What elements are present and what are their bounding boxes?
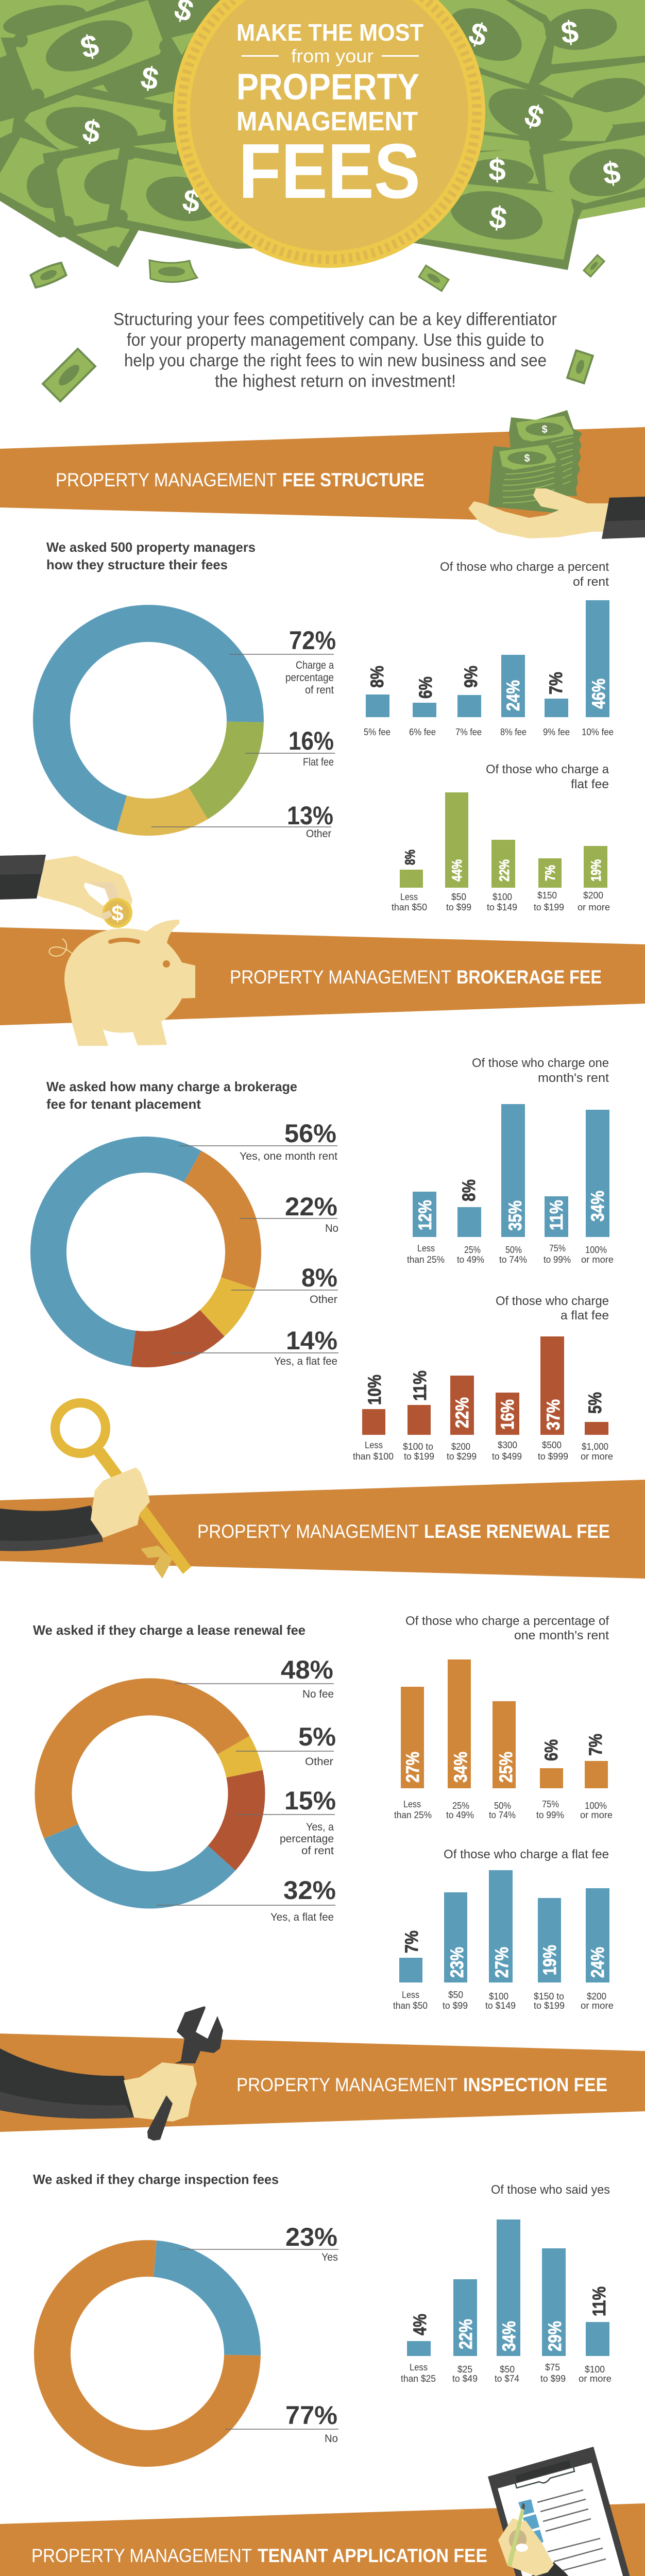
bar chart: percent of rent: of rent [573, 575, 609, 589]
heading [46, 1079, 297, 1112]
bar chart: flat fee: $200 [451, 1442, 470, 1452]
banner heading: PROPERTY MANAGEMENT [197, 1521, 419, 1542]
bar chart: percentage of rent: to 74% [489, 1810, 516, 1820]
bar chart: inspection amount: to $99 [540, 2374, 566, 2384]
coin [173, 0, 485, 268]
bar chart: percentage of rent: 100% [585, 1801, 607, 1811]
bar chart: flat fee: 19% [540, 1945, 560, 1975]
bar chart: percent of rent: 8% fee [500, 727, 527, 737]
bar chart: percentage of rent: 75% [542, 1799, 559, 1809]
legend: 32% [157, 1876, 336, 1923]
heading: We asked if they charge a lease renewal fee [33, 1622, 305, 1638]
bar chart: percent of rent: 46% [589, 679, 609, 709]
bar chart: one month's rent: 100% [585, 1245, 607, 1255]
panel: inspection survey [33, 2172, 612, 2456]
legend: 72%: percentage [285, 672, 334, 684]
banner: inspection fee [0, 2006, 645, 2141]
legend: 15% [236, 1786, 336, 1857]
panel: brokerage fee survey [8, 1056, 614, 1462]
bar chart: inspection amount: Less [410, 2362, 428, 2372]
legend: 14%: Yes, a flat fee [274, 1355, 337, 1367]
bar chart: one month's rent: 35% [505, 1200, 525, 1231]
legend: 8%: 8% [301, 1263, 337, 1292]
bar chart: one month's rent: than 25% [407, 1255, 445, 1265]
bar chart: flat fee: 7% [402, 1930, 422, 1953]
bar chart: flat fee: 23% [447, 1947, 467, 1978]
bar chart: flat fee: $1,000 [582, 1442, 608, 1452]
bar chart: flat fee: 22% [452, 1397, 472, 1428]
money background: $ [80, 113, 103, 150]
bar chart: one month's rent: Less [417, 1243, 435, 1253]
bar chart: flat fee: 22% [497, 859, 512, 882]
legend: 16% [245, 726, 335, 768]
bar chart: flat fee: to $199 [534, 2001, 565, 2011]
legend: 13% [151, 801, 333, 840]
heading: fee for tenant placement [46, 1096, 201, 1112]
bar chart: one month's rent: to 74% [499, 1255, 527, 1265]
bar chart: percentage of rent: 25% [452, 1801, 469, 1811]
bar chart: one month's rent: or more [581, 1255, 614, 1265]
legend: 32%: Yes, a flat fee [270, 1911, 334, 1923]
bar chart: flat fee: to $199 [534, 902, 564, 912]
bar chart: flat fee: to $299 [447, 1451, 477, 1462]
bar chart: percent of rent: 5% fee [364, 727, 391, 737]
money background: $ [138, 60, 161, 97]
bar chart: flat fee [353, 1294, 613, 1462]
heading [46, 539, 256, 572]
legend: 72%: 72% [289, 626, 336, 655]
bar chart: flat fee: $300 [498, 1440, 517, 1450]
icon: hand holding money stacks: $ [541, 424, 548, 435]
bar chart: flat fee: 5% [585, 1392, 605, 1414]
legend: 23% [179, 2223, 338, 2263]
legend: 14% [171, 1326, 338, 1367]
money background [0, 0, 645, 273]
bar chart: percentage of rent: than 25% [394, 1810, 432, 1820]
bar chart: inspection amount: $75 [545, 2362, 560, 2372]
bar chart: flat fee: to $149 [485, 2001, 516, 2011]
bar chart: inspection amount: Of those who said yes [491, 2183, 610, 2197]
donut chart [45, 2251, 250, 2456]
legend: 8%: Other [310, 1294, 337, 1306]
bar chart: percentage of rent: 7% [586, 1734, 606, 1756]
bar chart: inspection amount: 29% [545, 2321, 565, 2351]
bar chart: percent of rent: 10% fee [582, 727, 614, 737]
bar chart: flat fee: to $149 [487, 902, 517, 912]
title: MANAGEMENT [236, 107, 418, 137]
legend: 14%: 14% [286, 1326, 337, 1355]
bar chart: percent of rent: 9% [461, 666, 481, 688]
legend: 5%: Other [305, 1756, 333, 1768]
bar chart: flat fee: flat fee [571, 777, 609, 791]
bar chart: one month's rent: month's rent [538, 1071, 609, 1085]
banner heading: PROPERTY MANAGEMENT [56, 469, 277, 490]
legend: 48%: No fee [302, 1688, 334, 1700]
legend: 72%: Charge a [296, 659, 334, 671]
banner heading: LEASE RENEWAL FEE [424, 1521, 610, 1542]
bar chart: percentage of rent: to 49% [446, 1810, 474, 1820]
bar chart: flat fee: 19% [588, 859, 604, 882]
icon: clipboard with hand and pencil [488, 2447, 645, 2576]
bar chart: flat fee: to $199 [404, 1451, 434, 1462]
bar chart: one month's rent: 75% [549, 1243, 566, 1253]
bar chart: percent of rent: Of those who charge a percent [440, 560, 609, 574]
bar chart: one month's rent: 25% [464, 1245, 481, 1255]
bar chart: percent of rent [364, 560, 614, 737]
bar chart: flat fee: $150 to [534, 1991, 564, 2002]
bar chart: flat fee: 8% [402, 850, 418, 865]
bar chart: flat fee: to $99 [446, 902, 471, 912]
bar chart: one month's rent: 11% [547, 1200, 567, 1230]
legend: 16%: Flat fee [303, 756, 334, 768]
donut chart [15, 587, 281, 853]
legend: 77%: 77% [285, 2401, 337, 2430]
bar chart: flat fee: or more [581, 2001, 614, 2011]
bar chart: inspection amount: 22% [456, 2319, 476, 2349]
bar chart: percent of rent: 9% fee [543, 727, 570, 737]
bar chart: one month's rent: to 49% [457, 1255, 484, 1265]
bar chart: flat fee: 11% [410, 1370, 430, 1401]
bar chart: flat fee: Of those who charge [496, 1294, 609, 1308]
bar chart: flat fee: 24% [588, 1947, 608, 1978]
panel: fee structure survey [15, 539, 614, 912]
legend: 22% [240, 1192, 338, 1234]
bar chart: flat fee: than $50 [393, 2001, 428, 2011]
money background: $ [487, 199, 509, 236]
bar chart: flat fee: $50 [448, 1990, 463, 2000]
banner heading: INSPECTION FEE [463, 2074, 607, 2095]
bar chart: flat fee: $200 [583, 890, 603, 901]
bar chart: one month's rent: Of those who charge one [472, 1056, 609, 1070]
bar chart: flat fee: to $499 [492, 1451, 522, 1462]
legend: 56%: Yes, one month rent [240, 1150, 337, 1162]
title: MAKE THE MOST [236, 19, 423, 46]
title: FEES [239, 127, 420, 214]
donut chart [8, 1114, 283, 1389]
bar chart: flat fee: 37% [544, 1399, 564, 1430]
icon: hand holding key [0, 1403, 191, 1579]
bar chart: flat fee: to $99 [443, 2001, 468, 2011]
legend: 32%: 32% [283, 1876, 336, 1905]
legend: 15%: percentage [280, 1833, 334, 1845]
bar chart: flat fee: or more [578, 902, 610, 912]
banner: tenant application fee [0, 2447, 645, 2576]
bar chart: flat fee: Less [400, 892, 418, 902]
legend: 22%: No [325, 1223, 338, 1234]
bar chart: flat fee: than $50 [392, 902, 427, 912]
legend: 8% [231, 1263, 338, 1306]
bar chart: inspection amount: 4% [410, 2314, 430, 2335]
title [236, 19, 423, 214]
bar chart: percentage of rent: or more [580, 1810, 613, 1820]
legend: 16%: 16% [288, 726, 334, 755]
legend: 13%: Other [306, 828, 331, 840]
bar chart: flat fee: 10% [365, 1375, 385, 1405]
bar chart: percentage of rent: 6% [541, 1739, 562, 1761]
donut chart [13, 1657, 286, 1930]
intro text: for your property management company. Use this guide to [127, 330, 544, 350]
bar chart: inspection amount: 11% [589, 2286, 609, 2316]
legend: 72%: of rent [305, 684, 334, 696]
heading: We asked if they charge inspection fees [33, 2172, 279, 2187]
legend: 77%: No [325, 2433, 338, 2445]
banner: brokerage fee [0, 920, 645, 1046]
bar chart: flat fee: Less [365, 1440, 383, 1450]
legend: 23%: 23% [285, 2223, 337, 2251]
intro text: help you charge the right fees to win new business and see [124, 351, 547, 370]
title: from your [291, 45, 374, 66]
legend: 13%: 13% [287, 801, 333, 830]
icon: piggy bank [49, 920, 195, 1046]
money background: $ [488, 152, 506, 187]
banner heading: PROPERTY MANAGEMENT [236, 2074, 457, 2095]
banner heading: FEE STRUCTURE [282, 469, 425, 490]
bar chart: percent of rent: 7% fee [455, 727, 482, 737]
bar chart: percentage of rent: 50% [494, 1801, 511, 1811]
heading: how they structure their fees [46, 557, 228, 572]
bar chart: percent of rent: 24% [503, 680, 523, 711]
icon: hand dropping coin: $ [111, 901, 124, 925]
bar chart: flat fee: 44% [449, 859, 465, 882]
bar chart: flat fee: or more [581, 1451, 613, 1462]
legend: 56% [179, 1119, 337, 1162]
bar chart: flat fee: $500 [542, 1440, 562, 1450]
bar chart: percent of rent: 6% fee [409, 727, 436, 737]
legend: 48% [175, 1655, 334, 1700]
bar chart: inspection amount: $100 [585, 2364, 605, 2375]
money background: $ [465, 15, 492, 54]
bar chart: inspection amount [401, 2183, 612, 2384]
bar chart: percent of rent: 8% [367, 666, 387, 688]
legend: 22%: 22% [285, 1192, 337, 1221]
bar chart: inspection amount: to $74 [495, 2374, 519, 2384]
money background: $ [77, 28, 102, 65]
bar chart: flat fee: Of those who charge a [486, 762, 609, 776]
bar chart: percentage of rent: 27% [403, 1752, 423, 1783]
legend: 56%: 56% [284, 1119, 336, 1148]
intro text [113, 310, 557, 391]
icon: hand holding money stacks [468, 410, 645, 539]
bar chart: one month's rent: 12% [415, 1200, 435, 1230]
legend: 15%: Yes, a [306, 1821, 334, 1833]
intro text: Structuring your fees competitively can be a key differentiator [113, 310, 557, 329]
intro text: the highest return on investment! [215, 371, 456, 391]
bar chart: percent of rent: 7% [546, 672, 566, 694]
bar chart: flat fee [393, 1848, 614, 2011]
banner heading: BROKERAGE FEE [456, 967, 602, 988]
panel: hero header [0, 0, 645, 401]
heading: We asked how many charge a brokerage [46, 1079, 297, 1094]
money background: $ [180, 182, 203, 219]
bar chart: flat fee: Of those who charge a flat fee [444, 1848, 609, 1861]
bar chart: percent of rent: 6% [416, 676, 436, 699]
bar chart: percentage of rent: Less [403, 1799, 421, 1809]
banner: lease renewal fee [0, 1403, 645, 1579]
falling bills [30, 255, 604, 401]
legend: 5% [236, 1722, 336, 1768]
bar chart: flat fee: $100 to [403, 1442, 433, 1452]
legend: 48%: 48% [281, 1655, 333, 1684]
bar chart: one month's rent: 50% [505, 1245, 522, 1255]
bar chart: percentage of rent: Of those who charge a percentage of [405, 1614, 609, 1628]
bar chart: flat fee: 7% [542, 865, 558, 881]
legend: 15%: 15% [284, 1786, 336, 1815]
bar chart: percentage of rent: 25% [496, 1752, 516, 1783]
icon: hand holding wrench [0, 2006, 223, 2141]
bar chart: inspection amount: or more [579, 2374, 612, 2384]
bar chart: flat fee: $200 [587, 1991, 606, 2002]
banner heading: PROPERTY MANAGEMENT [31, 2545, 252, 2566]
bar chart: flat fee: $150 [537, 890, 557, 901]
money background: $ [559, 14, 580, 50]
bar chart: one month's rent: 34% [588, 1191, 608, 1222]
heading: We asked 500 property managers [46, 539, 256, 555]
bar chart: inspection amount: $25 [457, 2364, 472, 2375]
bar chart: one month's rent: 8% [459, 1179, 479, 1201]
bar chart: flat fee: $100 [493, 892, 512, 902]
banner: fee structure [0, 410, 645, 539]
icon: hand dropping coin [0, 855, 132, 928]
bar chart: flat fee [392, 762, 610, 912]
bar chart: one month's rent: to 99% [544, 1255, 571, 1265]
money background: $ [520, 97, 548, 135]
bar chart: flat fee: than $100 [353, 1451, 394, 1462]
legend: 77% [225, 2401, 338, 2445]
legend: 5%: 5% [298, 1722, 336, 1751]
bar chart: flat fee: 16% [498, 1399, 518, 1430]
bar chart: flat fee: a flat fee [561, 1309, 609, 1323]
bar chart: one month's rent [407, 1056, 614, 1265]
bar chart: inspection amount: to $49 [452, 2374, 478, 2384]
bar chart: flat fee: 27% [492, 1947, 512, 1978]
legend: 72% [229, 626, 336, 696]
bar chart: percentage of rent: one month's rent [514, 1629, 609, 1642]
banner heading: PROPERTY MANAGEMENT [230, 967, 451, 988]
icon: hand holding money stacks: $ [524, 453, 530, 464]
bar chart: percentage of rent: to 99% [536, 1810, 564, 1820]
bar chart: inspection amount: 34% [499, 2321, 519, 2351]
bar chart: flat fee: to $999 [538, 1451, 568, 1462]
title: PROPERTY [236, 67, 419, 108]
legend: 15%: of rent [301, 1845, 334, 1857]
panel: lease renewal survey [13, 1614, 614, 2011]
money background: $ [601, 155, 622, 191]
bar chart: percentage of rent [394, 1614, 613, 1820]
bar chart: flat fee: $100 [489, 1991, 508, 2002]
bar chart: flat fee: $50 [451, 892, 466, 902]
bar chart: flat fee: Less [402, 1990, 419, 2000]
legend: 23%: Yes [321, 2251, 338, 2263]
bar chart: percentage of rent: 34% [451, 1752, 471, 1783]
bar chart: inspection amount: $50 [500, 2364, 515, 2375]
banner heading: TENANT APPLICATION FEE [258, 2545, 487, 2566]
bar chart: inspection amount: than $25 [401, 2374, 436, 2384]
